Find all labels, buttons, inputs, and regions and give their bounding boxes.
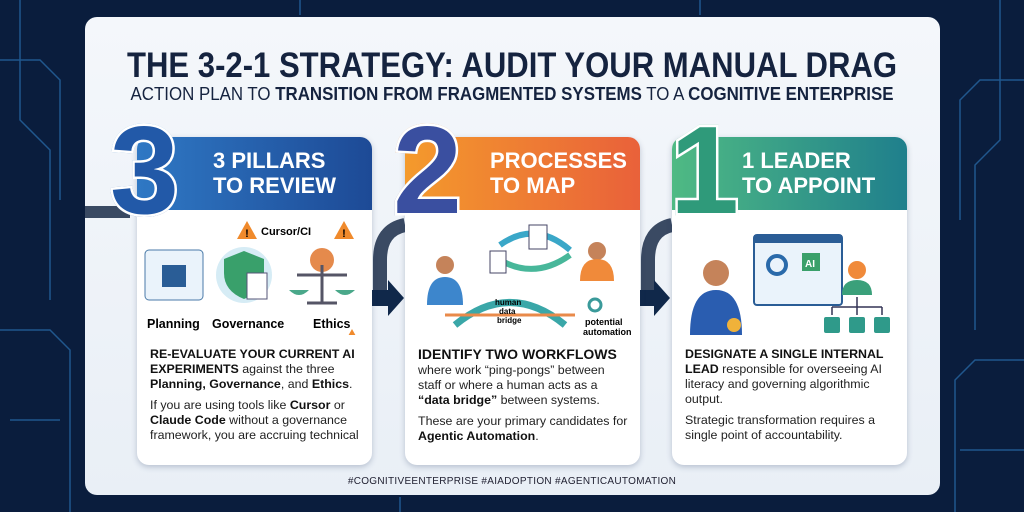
- big number 2: 2: [393, 102, 462, 240]
- card2 text: These are your primary candidates for Agentic Automation.: [418, 414, 627, 443]
- card2 heading: PROCESSES: [490, 148, 627, 173]
- card2 text: [418, 346, 628, 443]
- card1 icons: Cursor/CI: [261, 226, 311, 238]
- card1 icons: Planning: [147, 317, 200, 331]
- title: [127, 46, 897, 104]
- card 1: pillars: [137, 137, 372, 465]
- big number 1: 1: [670, 102, 739, 240]
- card2 text: IDENTIFY TWO WORKFLOWS where work “ping-pongs” between staff or where a human acts as a “data bridge” between systems.: [418, 346, 617, 407]
- card2 icons: bridge: [497, 316, 522, 325]
- card3 heading: [742, 148, 875, 198]
- card1 heading: [213, 148, 336, 198]
- card3 heading: 1 LEADER: [742, 148, 851, 173]
- card3 icons: [690, 234, 890, 335]
- title: THE 3-2-1 STRATEGY: AUDIT YOUR MANUAL DRAG: [127, 46, 897, 85]
- big number 3: 3: [110, 102, 179, 240]
- card2 icons: automation: [583, 327, 632, 337]
- card1 icons: Ethics: [313, 317, 351, 331]
- card2 icons: data: [499, 307, 516, 316]
- card2 heading: TO MAP: [490, 173, 575, 198]
- card3 text: DESIGNATE A SINGLE INTERNAL LEAD responsible for overseeing AI literacy and governing algorithmic output.: [685, 347, 883, 406]
- arrows: [370, 280, 404, 316]
- card1 heading: TO REVIEW: [213, 173, 336, 198]
- card2 icons: human: [495, 298, 521, 307]
- card3 text: [685, 347, 884, 442]
- card3 icons: AI: [805, 259, 815, 270]
- card1 text: If you are using tools like Cursor or Claude Code without a governance framework, you are accruing technical: [150, 398, 359, 442]
- card2 icons: potential: [585, 317, 622, 327]
- hashtags footer: #COGNITIVEENTERPRISE #AIADOPTION #AGENTICAUTOMATION: [348, 476, 676, 487]
- card1 icons: [144, 221, 356, 335]
- card 3: leader: [672, 137, 907, 465]
- card 2: processes: [405, 137, 640, 465]
- title: ACTION PLAN TO TRANSITION FROM FRAGMENTED SYSTEMS TO A COGNITIVE ENTERPRISE: [130, 84, 894, 104]
- card2 icons: [427, 224, 632, 337]
- card3 heading: TO APPOINT: [742, 173, 875, 198]
- main panel: [85, 17, 940, 495]
- card1 text: RE-EVALUATE YOUR CURRENT AI EXPERIMENTS against the three Planning, Governance, and Ethics.: [150, 347, 355, 391]
- card3 text: Strategic transformation requires a single point of accountability.: [685, 413, 875, 442]
- card1 icons: Governance: [212, 317, 284, 331]
- card1 heading: 3 PILLARS: [213, 148, 325, 173]
- card1 text: [150, 347, 359, 442]
- card2 heading: [490, 148, 627, 198]
- card1 icons: !: [245, 228, 249, 240]
- card1 icons: !: [342, 228, 346, 240]
